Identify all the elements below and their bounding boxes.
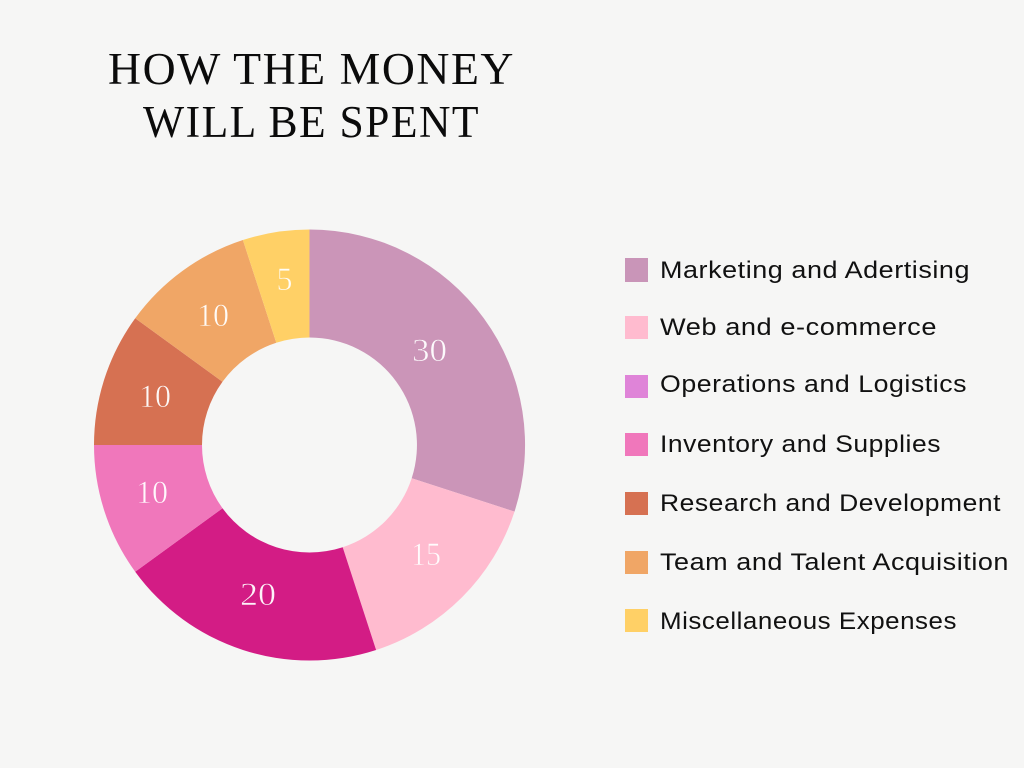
segment: Marketing and Advertising 30: 30	[412, 333, 447, 369]
segment: Inventory and Supplies 10	[94, 445, 222, 572]
title: HOW THE MONEY	[108, 44, 515, 94]
title	[108, 44, 515, 147]
segment: Marketing and Advertising 30	[310, 229, 525, 512]
legend item: Research and Development: Research and Development	[660, 490, 1001, 517]
donut chart	[94, 229, 525, 661]
segment: Miscellaneous Expenses 5: 5	[276, 262, 292, 298]
legend item: Team and Talent Acquisition: Team and Talent Acquisition	[660, 549, 1009, 576]
segment: Web and e-commerce 15	[343, 478, 514, 650]
legend item: Web and e-commerce: Web and e-commerce	[660, 314, 937, 341]
legend	[625, 257, 1009, 635]
segment: Miscellaneous Expenses 5	[243, 229, 310, 343]
segment: Research and Development 10: 10	[139, 379, 171, 415]
segment: 20: 20	[240, 577, 276, 613]
legend item: Marketing and Adertising: Marketing and Adertising	[660, 257, 970, 284]
segment: Inventory and Supplies 10: 10	[136, 475, 168, 511]
segment: Team and Talent Acquisition 10: 10	[197, 298, 229, 334]
segment: Team and Talent Acquisition 10	[135, 240, 276, 382]
legend item: Miscellaneous Expenses: Miscellaneous Expenses	[660, 608, 957, 635]
segment: Web and e-commerce 15: 15	[411, 537, 441, 573]
legend item: Operations and Logistics: Operations and Logistics	[660, 371, 967, 398]
segment: Research and Development 10	[94, 318, 222, 445]
segment: 20	[135, 508, 376, 661]
legend item: Inventory and Supplies: Inventory and Supplies	[660, 431, 941, 458]
title: WILL BE SPENT	[143, 97, 480, 147]
